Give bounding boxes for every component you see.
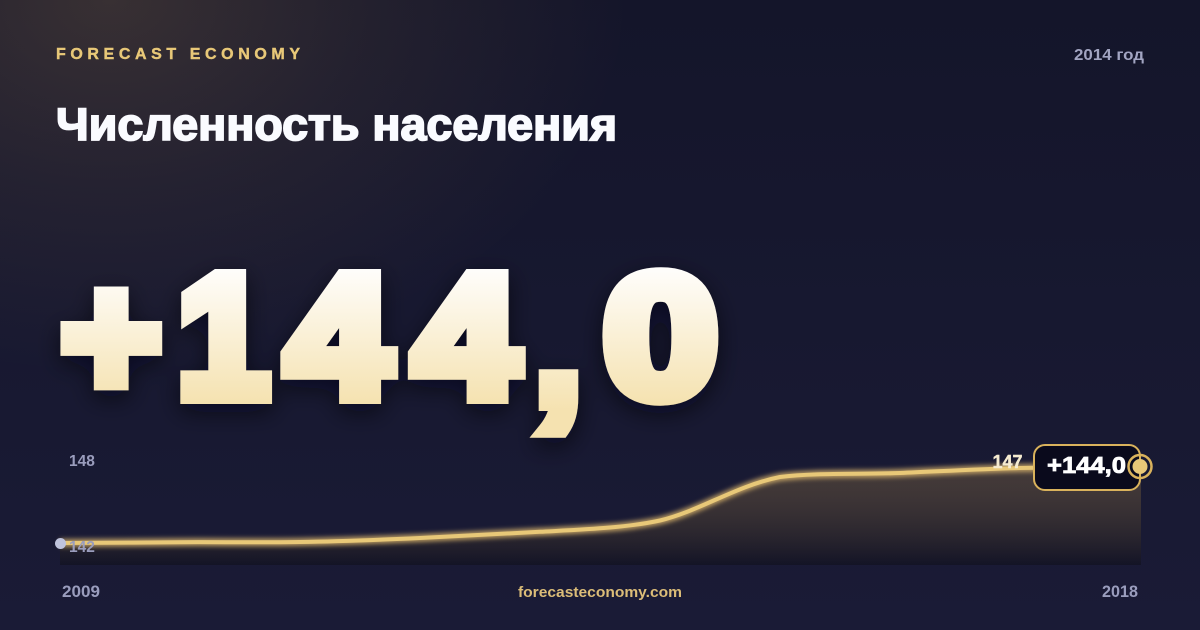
line glow: [60, 466, 1140, 543]
end year: 2018: [1102, 583, 1138, 601]
brand label: FORECAST ECONOMY: [56, 46, 300, 63]
big number: 1: [178, 239, 269, 433]
title: Численность населения: [56, 99, 617, 150]
end value label: 147: [992, 452, 1023, 472]
axis label 148: 148: [69, 453, 95, 470]
end marker: [1128, 455, 1152, 478]
start year: 2009: [62, 583, 100, 601]
chart area fill: [60, 466, 1141, 565]
value badge: [1034, 445, 1140, 490]
big number: ,: [535, 247, 582, 440]
axis label 142: 142: [69, 539, 95, 556]
line chart: [55, 466, 1141, 565]
start point: [55, 538, 66, 549]
big number: 4: [414, 241, 518, 433]
big number: +: [61, 240, 161, 433]
line: [60, 466, 1140, 543]
year label: 2014 год: [1074, 47, 1144, 64]
big number: 0: [604, 241, 717, 433]
big number: [61, 239, 717, 440]
value badge: +144,0: [1047, 452, 1126, 478]
source url: forecasteconomy.com: [518, 584, 682, 601]
big number: 4: [286, 241, 391, 433]
